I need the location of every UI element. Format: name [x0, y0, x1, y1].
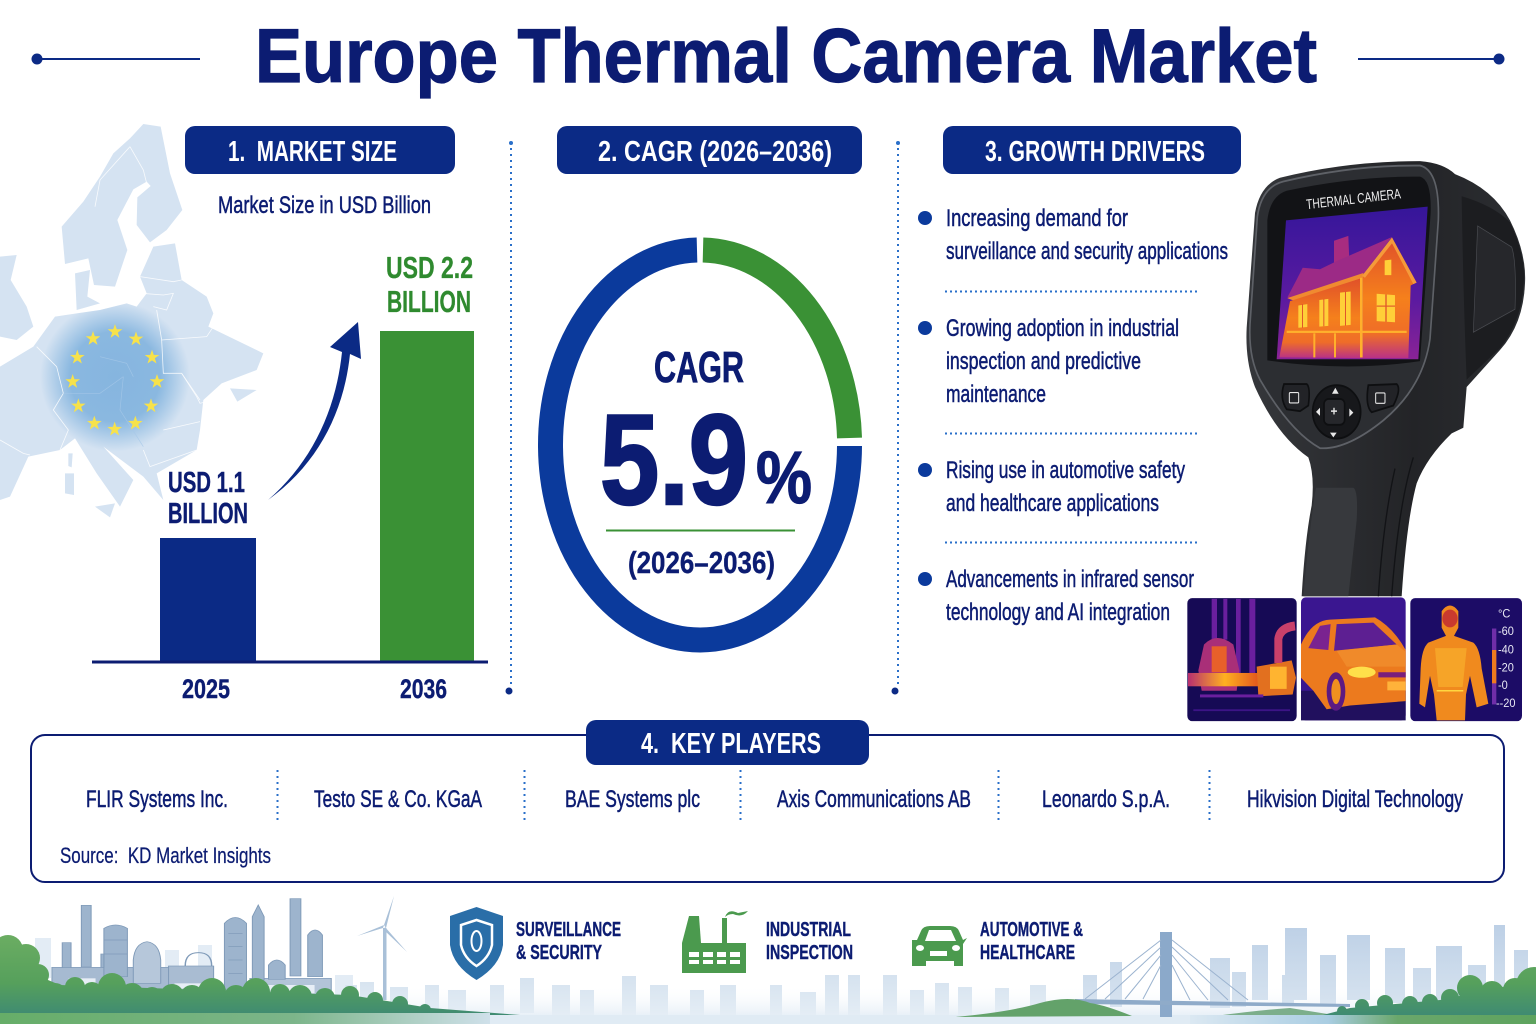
icon: shield	[450, 907, 503, 980]
footer: industrial plant illustration	[52, 899, 331, 1002]
driver 2: inspection and predictive	[946, 348, 1141, 375]
footer: wind turbine	[357, 896, 407, 1000]
chart subtitle: Market Size in USD Billion	[218, 192, 431, 219]
company names: Hikvision Digital Technology	[1247, 786, 1463, 813]
panel: market size	[92, 126, 488, 704]
divider 1	[506, 141, 513, 694]
value label 2025: USD 1.1	[168, 467, 245, 499]
driver 4: Advancements in infrared sensor	[946, 566, 1194, 593]
company names	[86, 786, 1463, 813]
heading: key players: 4. KEY PLAYERS	[641, 728, 821, 760]
heading: CAGR: 2. CAGR (2026–2036)	[598, 136, 832, 168]
driver 1: surveillance and security applications	[946, 238, 1228, 265]
heading: key players	[586, 720, 869, 765]
driver 2: maintenance	[946, 381, 1046, 408]
label: automotive and healthcare: AUTOMOTIVE &	[980, 919, 1083, 941]
heading: growth drivers	[943, 126, 1241, 174]
thermal image: car	[1301, 597, 1406, 720]
panel: key players	[31, 720, 1504, 882]
company names: BAE Systems plc	[565, 786, 700, 813]
value label 2036: BILLION	[387, 284, 471, 319]
label: surveillance and security	[516, 919, 621, 964]
driver 2: Growing adoption in industrial	[946, 315, 1179, 342]
label: industrial inspection	[766, 919, 853, 964]
label: surveillance and security: & SECURITY	[516, 942, 602, 964]
bar chart: 2036	[400, 674, 447, 704]
company names: FLIR Systems Inc.	[86, 786, 228, 813]
donut ring	[551, 250, 850, 640]
bar chart: 2025	[182, 674, 230, 704]
label: industrial inspection: INSPECTION	[766, 942, 853, 964]
camera screen thermal house	[1279, 236, 1417, 358]
panel: growth drivers	[918, 126, 1241, 626]
divider 2	[892, 141, 900, 694]
label: surveillance and security: SURVEILLANCE	[516, 919, 621, 941]
CAGR value: (2026–2036)	[628, 545, 775, 580]
thermal image: human body: --20	[1496, 697, 1516, 710]
footer background skyline	[0, 925, 1536, 1024]
bar chart	[92, 331, 488, 704]
label: automotive and healthcare: HEALTHCARE	[980, 942, 1075, 964]
thermal image: human body: -20	[1498, 661, 1514, 675]
heading: market size: 1. MARKET SIZE	[228, 136, 397, 168]
title rule right	[1358, 54, 1504, 64]
title: Europe Thermal Camera Market	[255, 14, 1317, 99]
heading: growth drivers: 3. GROWTH DRIVERS	[985, 136, 1205, 168]
company names: Axis Communications AB	[777, 786, 971, 813]
footer: cable-stayed bridge and river	[490, 932, 1350, 1024]
driver 3: and healthcare applications	[946, 490, 1159, 517]
driver 3	[918, 457, 1185, 517]
map of Europe with EU stars	[0, 124, 263, 517]
value label 2025: BILLION	[168, 498, 248, 530]
heading: CAGR	[557, 126, 862, 174]
panel: CAGR	[551, 126, 862, 640]
value label 2025	[168, 467, 248, 530]
thermal image: industrial pipes	[1187, 598, 1297, 721]
title rule left	[32, 54, 200, 64]
company names: Testo SE & Co. KGaA	[314, 786, 482, 813]
thermal image: human body: -0	[1498, 678, 1508, 692]
driver 4	[918, 566, 1194, 626]
footer: right trees and ground	[1190, 967, 1536, 1024]
driver 4: technology and AI integration	[946, 599, 1170, 626]
value label 2036: USD 2.2	[386, 250, 473, 285]
CAGR value: CAGR	[654, 343, 744, 392]
footer: left trees and ground	[0, 935, 520, 1024]
driver 3: Rising use in automotive safety	[946, 457, 1185, 484]
source note: Source: KD Market Insights	[60, 843, 271, 868]
thermal image: human body: °C	[1498, 607, 1510, 621]
thermal image: human body: -40	[1498, 643, 1514, 657]
driver 2	[918, 315, 1179, 408]
label: automotive and healthcare	[980, 919, 1083, 964]
CAGR value: %	[756, 436, 812, 519]
company names: Leonardo S.p.A.	[1042, 786, 1170, 813]
CAGR value	[600, 343, 812, 580]
icon: factory	[682, 911, 748, 973]
icon: car	[912, 926, 967, 966]
thermal image: human body: -60	[1498, 625, 1514, 638]
driver 1: Increasing demand for	[946, 205, 1128, 232]
thermal camera illustration: THERMAL CAMERA	[1305, 186, 1401, 212]
CAGR value: 5.9	[600, 389, 748, 532]
thermal image: human body	[1410, 598, 1522, 721]
heading: market size	[185, 126, 455, 174]
thermal camera illustration	[1246, 161, 1525, 596]
growth arrow	[268, 322, 361, 500]
label: industrial inspection: INDUSTRIAL	[766, 919, 851, 941]
driver 1	[918, 205, 1228, 265]
value label 2036	[386, 250, 473, 319]
